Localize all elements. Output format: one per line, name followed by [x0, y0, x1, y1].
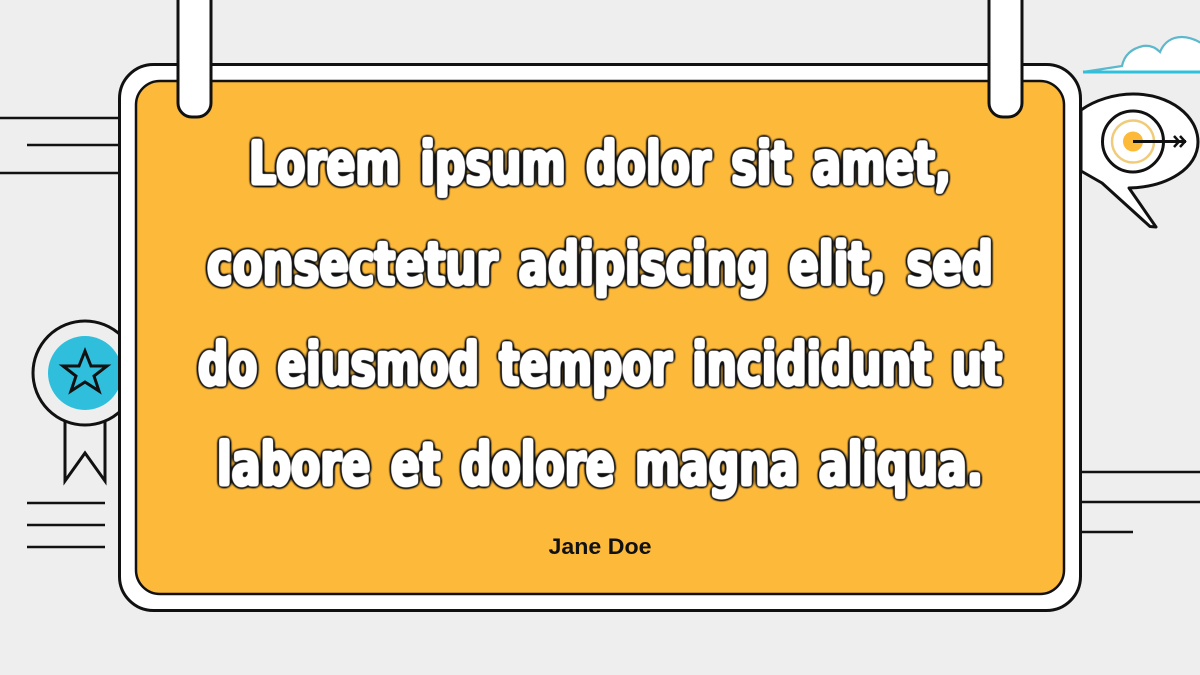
text lines under ribbon	[27, 503, 105, 547]
panel: sign orange face	[136, 81, 1064, 594]
quote text	[198, 129, 1002, 500]
icon: award ribbon	[33, 321, 137, 481]
icon: target speech bubble	[1081, 94, 1198, 227]
panel: sign white frame	[120, 64, 1080, 610]
hanger strap left	[178, 0, 211, 117]
left lines top	[0, 118, 120, 173]
icon: cloud	[1083, 37, 1200, 72]
right lines bottom	[1080, 472, 1200, 532]
hanger strap right	[989, 0, 1022, 117]
attribution: Jane Doe	[548, 534, 652, 559]
